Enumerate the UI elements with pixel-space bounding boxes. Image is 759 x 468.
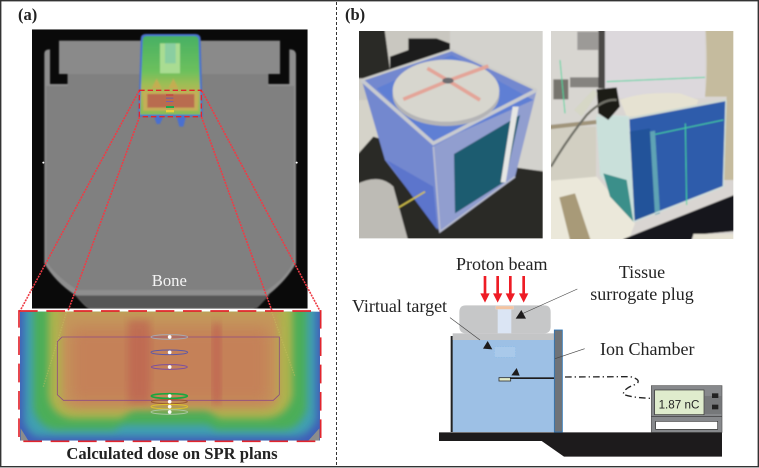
label: virtual target: Virtual target: [352, 296, 447, 316]
electrometer: [651, 386, 722, 432]
label: ion chamber: Ion Chamber: [600, 339, 694, 359]
label: tissue surrogate plug: surrogate plug: [590, 284, 694, 304]
plug holder disk: [459, 305, 551, 333]
panel: CT slice with dose overlay: [32, 29, 308, 310]
tank lid: [453, 333, 554, 340]
panel divider: [336, 2, 338, 466]
signal cable: [565, 377, 650, 398]
leader lines and pointers: [450, 289, 585, 376]
schematic diagram: [439, 276, 722, 457]
photo: phantom with plug: [359, 31, 543, 238]
plug cap: [496, 306, 514, 309]
zoom box on dose region: [139, 90, 201, 117]
panel label (b): (b): [345, 5, 365, 24]
water tank: [452, 336, 554, 432]
panel label (a): (a): [18, 5, 37, 24]
caption: Calculated dose on SPR plans: [66, 444, 278, 463]
panel: zoomed dose heatmap: [18, 310, 322, 442]
label: tissue surrogate plug: Tissue: [619, 262, 665, 282]
proton beam arrows: [480, 276, 528, 303]
ion chamber: [499, 377, 554, 381]
dashed border: [19, 311, 321, 441]
target outline: [57, 337, 279, 400]
label: proton beam: Proton beam: [456, 254, 548, 274]
electrometer: 1.87 nC: [659, 398, 699, 411]
zoom guide lines: [20, 91, 320, 311]
contour ellipses and points: [151, 335, 188, 414]
tank left wall: [451, 336, 453, 432]
dose isodose marks: [166, 94, 174, 112]
photo: phantom side view: [551, 31, 734, 239]
colour wash: [20, 312, 320, 440]
table: [439, 432, 722, 457]
virtual target: [494, 347, 516, 357]
tank side wall: [554, 330, 562, 432]
dose overlay: [138, 34, 203, 127]
phantom body: [44, 41, 296, 310]
tissue surrogate plug: [498, 309, 511, 333]
label: tissue surrogate plug: [590, 262, 694, 304]
bone label: Bone: [152, 271, 187, 290]
